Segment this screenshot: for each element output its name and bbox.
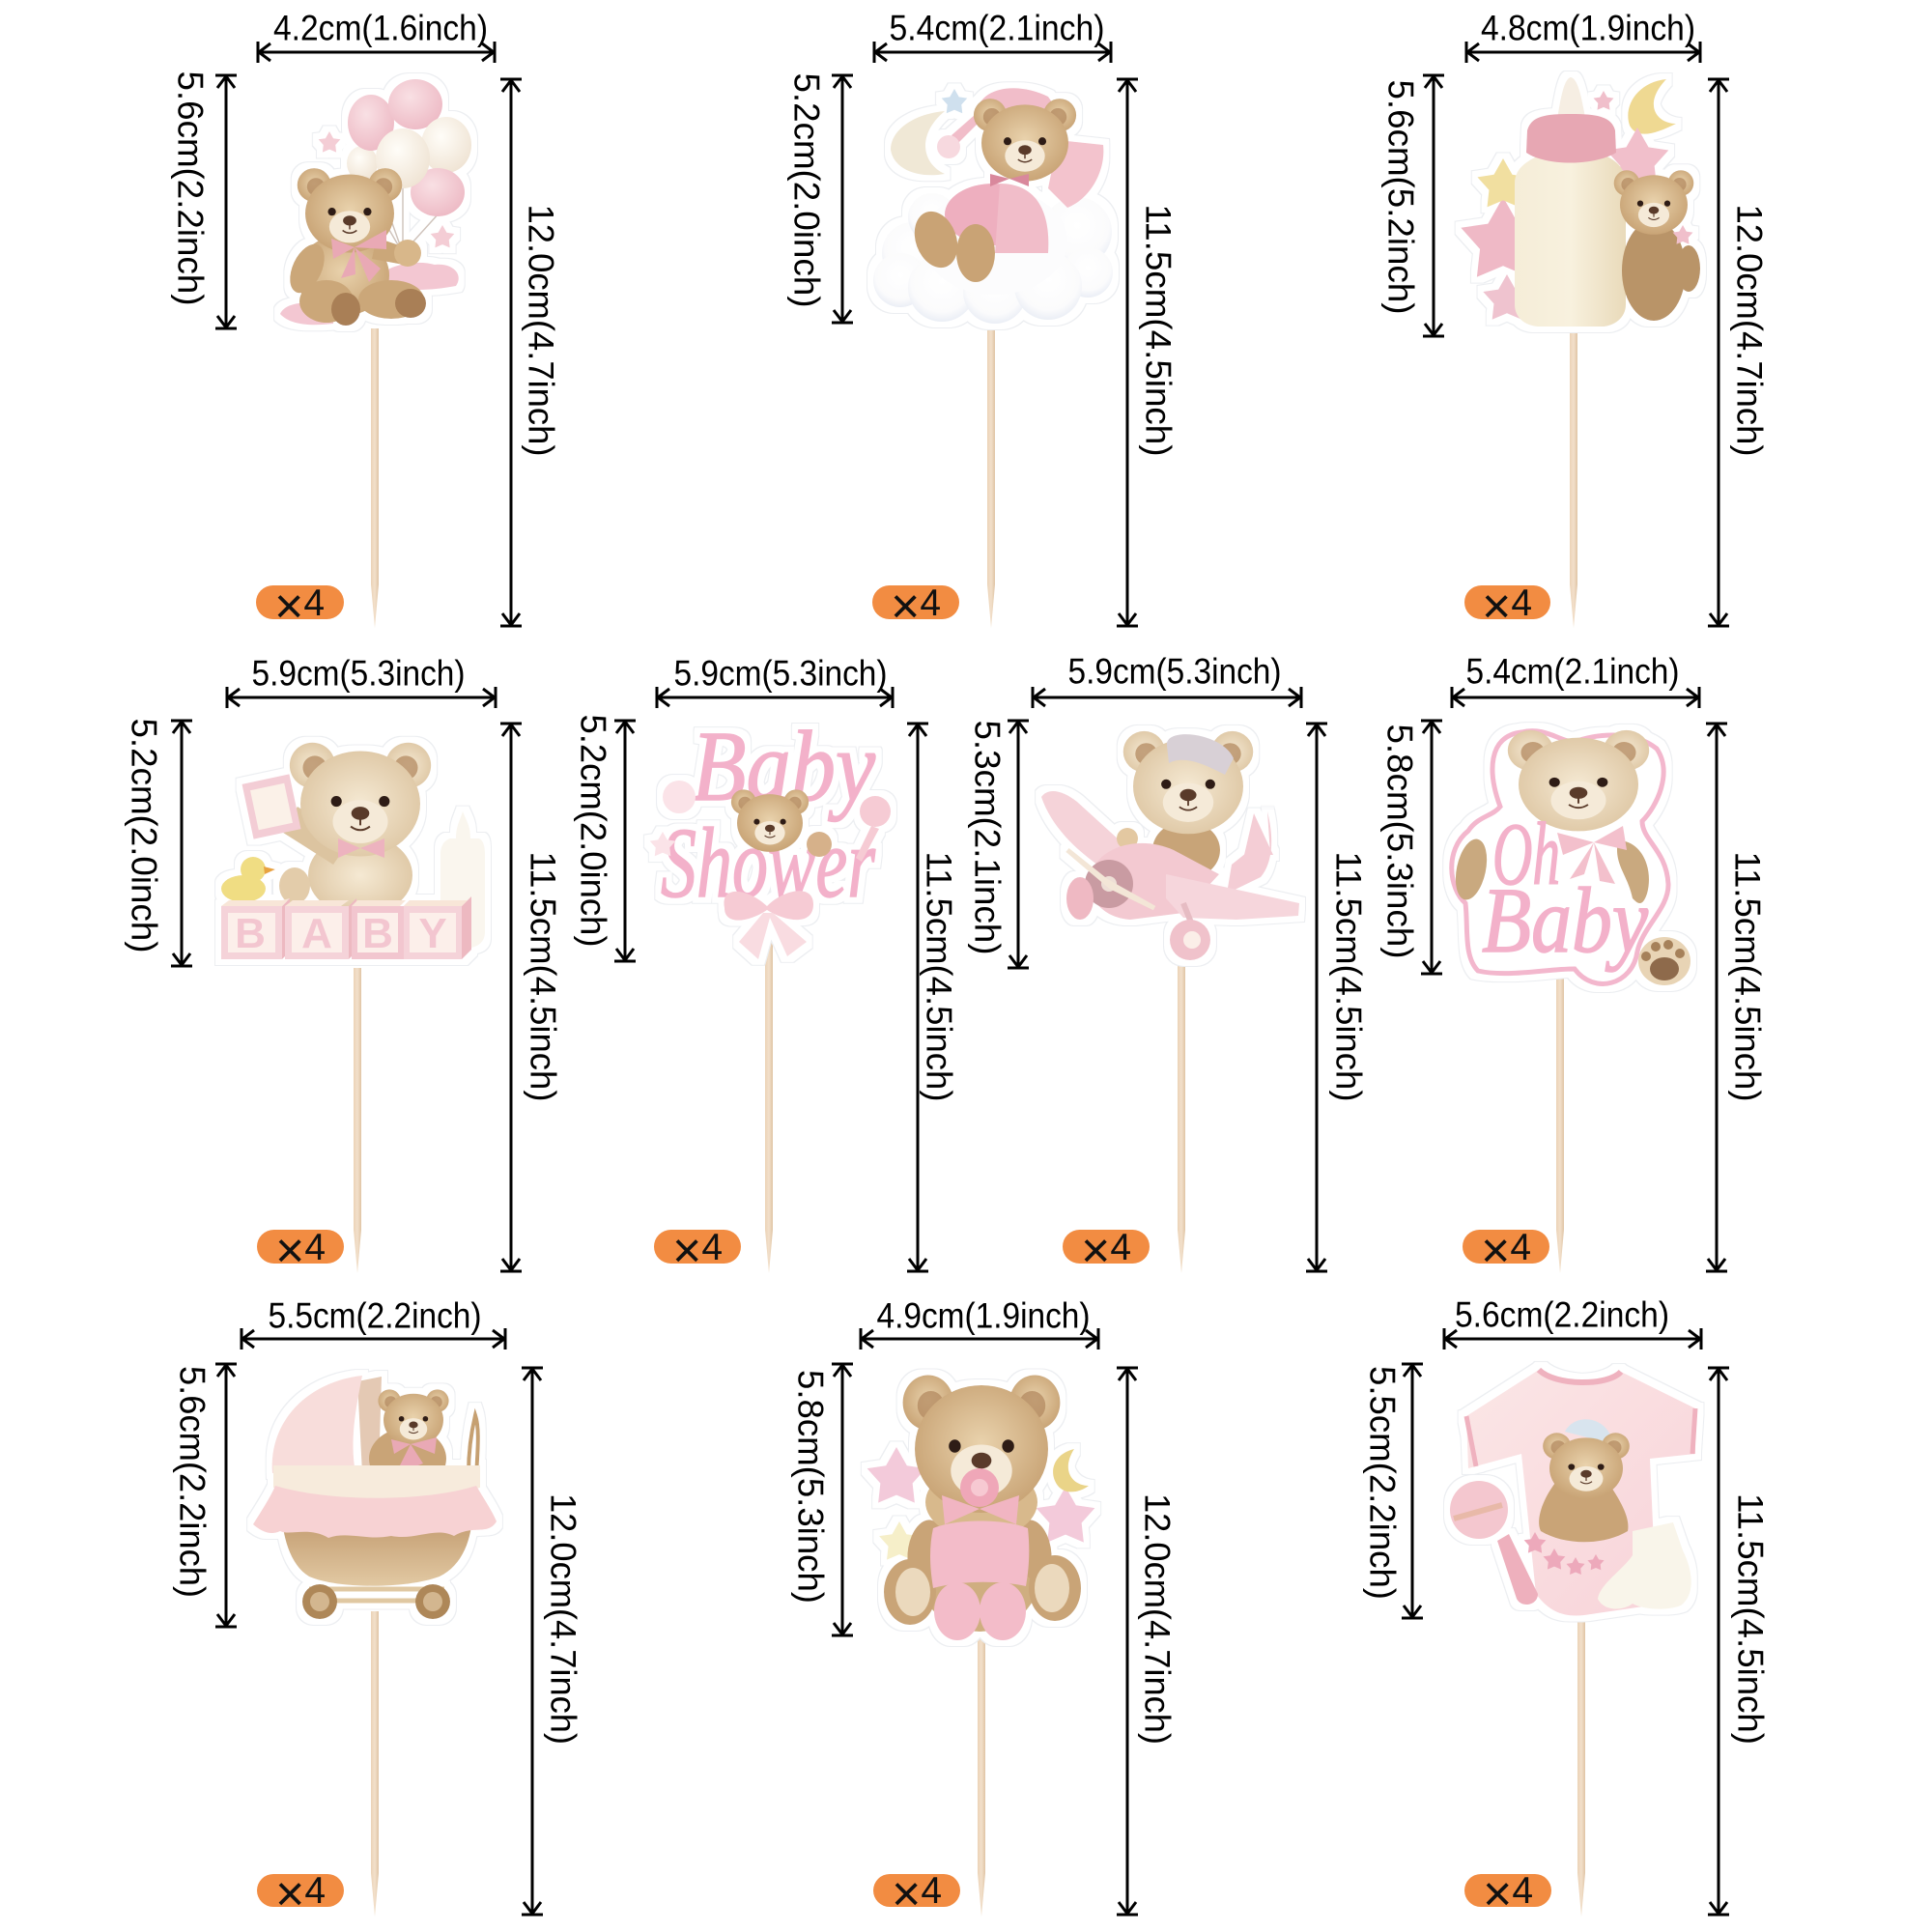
top width dimension: 4.9cm(1.9inch) [877,1296,1090,1335]
total height dimension [1708,79,1770,626]
left height dimension [124,719,192,966]
topper illustration: bear with pillow and shoes [867,1376,1094,1640]
cell 4: teddy with baby blocks [124,653,562,1279]
wooden stick [1570,331,1577,628]
cell 1: teddy with balloons [170,8,560,635]
topper illustration: Oh Baby bear sign: Baby [1482,868,1648,972]
left height dimension: 5.3cm(2.1inch) [968,721,1007,954]
left height dimension [786,73,853,323]
total height dimension [500,724,562,1271]
left height dimension [1379,721,1442,974]
top width dimension [1033,651,1301,708]
topper illustration: bear, duck, bottle and blocks [221,743,485,959]
quantity badge: × [1481,1223,1510,1279]
total height dimension [1706,724,1768,1271]
topper illustration: bear flying a pink plane [1041,731,1299,960]
total height dimension: 11.5cm(4.5inch) [1727,852,1768,1101]
left height dimension [172,1364,237,1627]
left height dimension: 5.2cm(2.0inch) [574,715,612,947]
left height dimension [1381,75,1444,336]
quantity badge: 4 [701,1227,723,1267]
top width dimension: 5.5cm(2.2inch) [269,1296,481,1335]
alphabet blocks: Y [418,910,447,957]
quantity badge [257,1223,344,1279]
top width dimension [1444,1294,1701,1350]
total height dimension: 12.0cm(4.7inch) [1138,1493,1177,1745]
quantity badge [654,1223,741,1279]
quantity badge: × [275,1223,304,1279]
topper illustration: pram with bear [253,1376,497,1619]
cell 7: Oh Baby [1379,651,1768,1279]
top width dimension [874,8,1111,63]
left height dimension: 5.6cm(5.2inch) [1381,79,1420,315]
top width dimension: 4.8cm(1.9inch) [1481,8,1695,48]
left height dimension: 5.5cm(2.2inch) [1362,1366,1403,1600]
total height dimension: 11.5cm(4.5inch) [524,852,562,1101]
alphabet blocks: B [362,910,393,957]
total height dimension [522,1368,583,1915]
cell 2: teddy sleeping on cloud [786,8,1179,635]
topper illustration: Oh Baby bear sign: Oh [1492,805,1560,903]
top width dimension: 5.6cm(2.2inch) [1455,1294,1669,1335]
top width dimension [1452,651,1699,708]
wooden stick [765,941,773,1273]
top width dimension: 5.9cm(5.3inch) [674,653,887,694]
quantity badge: 4 [1110,1227,1131,1267]
left height dimension [790,1364,853,1635]
quantity badge [1464,1866,1551,1922]
left height dimension: 5.2cm(2.0inch) [786,73,827,307]
quantity badge: 4 [304,1870,326,1911]
alphabet blocks: A [301,910,332,957]
total height dimension [500,79,560,626]
quantity badge: × [1483,1866,1512,1922]
left height dimension [170,71,237,328]
quantity badge: × [1482,579,1511,635]
wooden stick [1178,963,1185,1273]
quantity badge [256,579,344,635]
top width dimension: 5.4cm(2.1inch) [889,8,1105,48]
cell 5: Baby Shower [574,653,958,1279]
quantity badge [1464,579,1550,635]
left height dimension: 5.2cm(2.0inch) [124,719,164,952]
cell 9: teddy with pacifier [790,1296,1177,1922]
alphabet blocks: B [235,910,266,957]
top width dimension [258,8,495,63]
quantity badge: × [891,579,920,635]
top width dimension: 4.2cm(1.6inch) [273,8,488,48]
top width dimension: 5.4cm(2.1inch) [1466,651,1679,692]
wooden stick [1577,1620,1585,1917]
topper illustration: onesie, bear, rattle and socks [1450,1370,1695,1615]
left height dimension: 5.8cm(5.3inch) [1379,724,1420,958]
top width dimension: 5.9cm(5.3inch) [1068,651,1281,692]
left height dimension: 5.6cm(2.2inch) [172,1366,213,1598]
left height dimension [1362,1364,1423,1618]
cell 10: onesie with teddy [1362,1294,1770,1922]
total height dimension: 11.5cm(4.5inch) [1138,205,1179,456]
quantity badge: × [274,579,303,635]
total height dimension [907,724,958,1271]
total height dimension: 11.5cm(4.5inch) [1731,1493,1770,1745]
topper illustration: Baby Shower lettering: Shower [661,808,875,919]
top width dimension [657,653,893,708]
cell 3: bottle with teddy [1381,8,1770,635]
quantity badge: 4 [1511,582,1532,624]
total height dimension: 11.5cm(4.5inch) [920,852,958,1101]
total height dimension: 12.0cm(4.7inch) [1729,205,1770,456]
topper illustration: bear on a cloud [873,88,1113,324]
quantity badge [873,1866,960,1922]
quantity badge: 4 [1510,1227,1531,1267]
total height dimension [1117,79,1179,626]
total height dimension: 11.5cm(4.5inch) [1329,852,1368,1101]
alphabet blocks [221,896,471,959]
quantity badge [872,579,959,635]
cell 8: teddy in pram [172,1296,583,1922]
top width dimension: 5.9cm(5.3inch) [251,653,466,694]
quantity badge [1063,1223,1150,1279]
quantity badge: 4 [921,1870,942,1911]
quantity badge: × [1081,1223,1110,1279]
topper illustration: Baby Shower lettering: Baby [692,711,876,822]
topper illustration: Oh Baby bear sign [1451,730,1690,985]
quantity badge: 4 [920,582,941,624]
wooden stick [371,328,379,628]
left height dimension [968,721,1029,968]
total height dimension: 12.0cm(4.7inch) [543,1493,583,1745]
quantity badge: × [275,1866,304,1922]
top width dimension [242,1296,505,1350]
left height dimension: 5.6cm(2.2inch) [170,71,211,305]
quantity badge: × [672,1223,701,1279]
wooden stick [354,968,361,1273]
top width dimension [1466,8,1700,63]
wooden stick [1556,976,1564,1273]
topper illustration: Baby Shower lettering [650,711,891,959]
quantity badge [1463,1223,1549,1279]
total height dimension [1306,724,1368,1271]
topper illustration: bear and balloons [280,79,471,326]
quantity badge [257,1866,344,1922]
left height dimension [574,715,636,961]
left height dimension: 5.8cm(5.3inch) [790,1370,831,1604]
paw icon [1638,937,1690,985]
top width dimension [227,653,496,708]
cell 6: teddy in airplane [968,651,1368,1279]
total height dimension [1708,1368,1770,1915]
wooden stick [987,325,995,628]
quantity badge: 4 [1512,1870,1533,1911]
quantity badge: 4 [303,582,325,624]
quantity badge: × [892,1866,921,1922]
quantity badge: 4 [304,1227,326,1267]
total height dimension [1117,1368,1177,1915]
wooden stick [978,1637,985,1917]
wooden stick [371,1611,379,1917]
topper illustration: baby bottle and bear [1461,77,1700,327]
total height dimension: 12.0cm(4.7inch) [522,205,560,456]
top width dimension [861,1296,1098,1350]
